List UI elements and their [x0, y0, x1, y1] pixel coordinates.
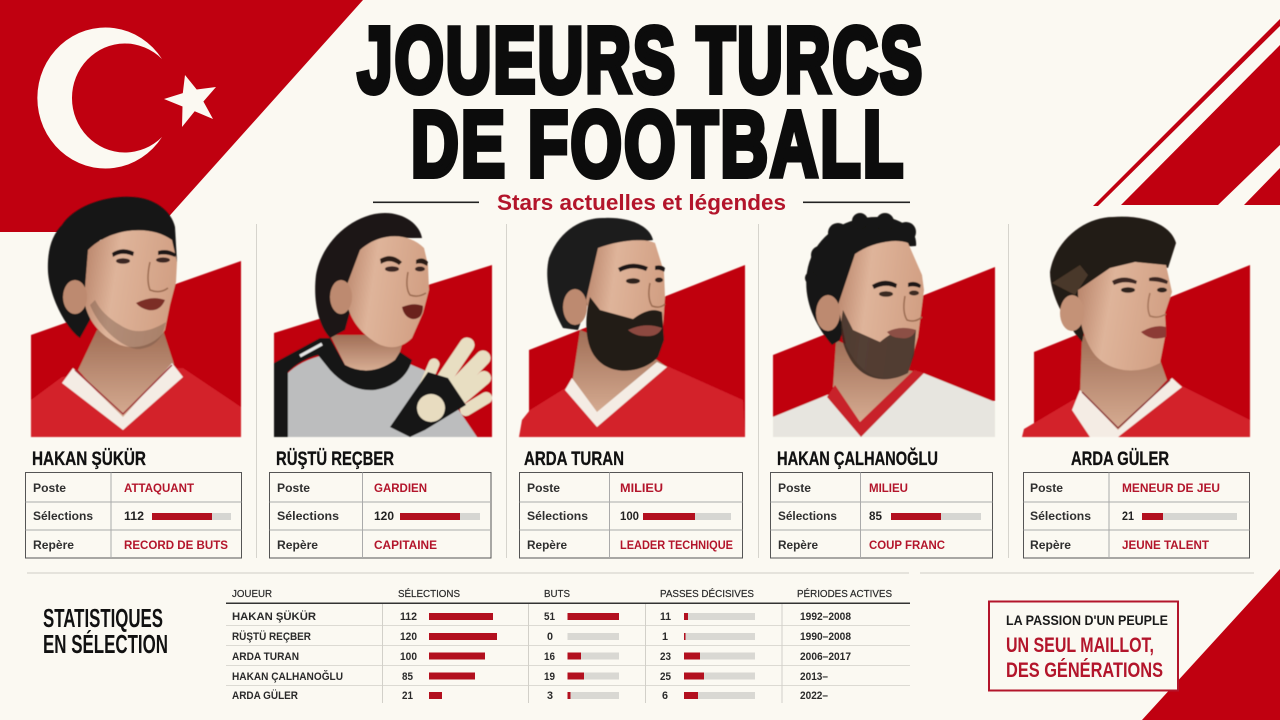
portrait: Rüştü Reçber: [274, 213, 492, 437]
section heading: statistics: STATISTIQUES: [43, 603, 163, 633]
callout: DES GÉNÉRATIONS: [1006, 659, 1163, 682]
stats table: 112: [124, 509, 144, 523]
row: Hakan Şükür: HAKAN ŞÜKÜR: [232, 610, 316, 623]
row: Hakan Şükür: 51: [544, 611, 555, 623]
player name: ARDA TURAN: [524, 448, 624, 470]
section rule: [27, 572, 1254, 574]
row: Arda Turan: 23: [660, 651, 671, 663]
player name: ARDA GÜLER: [1071, 447, 1169, 470]
stats table: MILIEU: [869, 481, 908, 495]
stats table: Repère: [778, 538, 818, 552]
statistics table: [226, 587, 910, 703]
row: Arda Turan: 16: [544, 651, 555, 663]
row: Arda Turan: [232, 651, 851, 663]
row: Rüştü Reçber: [232, 630, 851, 643]
table header: PÉRIODES ACTIVES: [797, 587, 892, 600]
stats table: CAPITAINE: [374, 538, 437, 552]
icon: crescent: [37, 27, 162, 168]
row: Hakan Çalhanoğlu: HAKAN ÇALHANOĞLU: [232, 670, 343, 683]
stats table: [770, 472, 992, 558]
section heading: statistics: [43, 603, 168, 659]
stats table: Repère: [1030, 538, 1071, 552]
stats table: Repère: [527, 538, 567, 552]
corner stripes top right: [1093, 19, 1280, 206]
stats table: Poste: [527, 481, 560, 495]
portrait: Arda Güler: [1022, 217, 1250, 437]
stats table: [270, 472, 491, 558]
player name: HAKAN ŞÜKÜR: [32, 447, 146, 470]
player name: HAKAN ÇALHANOĞLU: [777, 447, 938, 470]
table header: SÉLECTIONS: [398, 587, 460, 600]
stats table: 21: [1122, 509, 1134, 523]
row: Hakan Şükür: 1992–2008: [800, 611, 851, 623]
row: Hakan Şükür: 11: [660, 611, 671, 623]
stats table: RECORD DE BUTS: [124, 538, 228, 552]
stats table: [520, 472, 742, 558]
icon: star: [164, 75, 216, 127]
card: Arda Turan: [519, 218, 745, 558]
callout: UN SEUL MAILLOT,: [1006, 634, 1154, 657]
row: Rüştü Reçber: 1: [662, 631, 668, 643]
table header: JOUEUR: [232, 588, 272, 600]
stats table: Repère: [33, 538, 74, 552]
row: Arda Güler: 6: [662, 690, 668, 702]
stats table: Poste: [277, 481, 310, 495]
row: Arda Güler: 21: [402, 690, 413, 702]
card: Rüştü Reçber: [270, 213, 492, 558]
title: JOUEURS TURCS: [358, 8, 924, 112]
stats table: MENEUR DE JEU: [1122, 481, 1220, 495]
row: Hakan Çalhanoğlu: 25: [660, 671, 671, 683]
stats table: 120: [374, 509, 394, 523]
table header: PASSES DÉCISIVES: [660, 587, 754, 600]
corner triangle bottom right: [1142, 569, 1280, 720]
table header: BUTS: [544, 588, 570, 600]
row: Hakan Çalhanoğlu: 19: [544, 671, 555, 683]
row: Arda Turan: ARDA TURAN: [232, 651, 299, 663]
stats table: Sélections: [33, 509, 93, 523]
row: Rüştü Reçber: 0: [547, 631, 553, 643]
card: Hakan Çalhanoğlu: [770, 213, 995, 558]
stats table: MILIEU: [620, 481, 663, 495]
stats table: Sélections: [527, 509, 588, 523]
stats table: LEADER TECHNIQUE: [620, 538, 733, 552]
card separators: [256, 224, 1009, 558]
title: [358, 8, 924, 197]
row: Rüştü Reçber: 120: [400, 631, 417, 643]
row: Arda Güler: ARDA GÜLER: [232, 689, 298, 702]
row: Hakan Şükür: 112: [400, 611, 417, 623]
player name: RÜŞTÜ REÇBER: [276, 447, 394, 470]
stats table: JEUNE TALENT: [1122, 538, 1210, 552]
row: Arda Güler: 2022–: [800, 690, 828, 702]
stats table: ATTAQUANT: [124, 481, 195, 495]
row: Arda Turan: 100: [400, 651, 417, 663]
title: DE FOOTBALL: [411, 93, 905, 197]
stats table: Poste: [1030, 481, 1063, 495]
subtitle: Stars actuelles et légendes: [497, 190, 786, 215]
portrait: Hakan Şükür: [31, 197, 241, 437]
stats table: COUP FRANC: [869, 538, 945, 552]
stats table: Sélections: [1030, 509, 1091, 523]
stats table: [1024, 472, 1250, 558]
portrait: Arda Turan: [519, 218, 745, 437]
grey bar tracks: [568, 613, 755, 699]
row: Rüştü Reçber: RÜŞTÜ REÇBER: [232, 630, 311, 643]
card: Hakan Şükür: [26, 197, 242, 558]
flag banner: [0, 0, 363, 232]
stats table: Poste: [778, 481, 811, 495]
stats table: 100: [620, 509, 639, 523]
section heading: statistics: EN SÉLECTION: [43, 629, 168, 659]
row: Arda Turan: 2006–2017: [800, 651, 851, 663]
stats table: Poste: [33, 481, 66, 495]
stats table: [26, 472, 242, 558]
row: Hakan Çalhanoğlu: 85: [402, 671, 413, 683]
callout: [989, 602, 1178, 690]
callout: LA PASSION D'UN PEUPLE: [1006, 612, 1168, 628]
row: Hakan Çalhanoğlu: 2013–: [800, 671, 828, 683]
row: Arda Güler: [232, 689, 828, 702]
row: Hakan Şükür: [232, 610, 851, 623]
table header: [226, 587, 910, 604]
row: Hakan Çalhanoğlu: [232, 670, 828, 683]
row: Rüştü Reçber: 1990–2008: [800, 631, 851, 643]
stats table: Sélections: [277, 509, 339, 523]
portrait: Hakan Çalhanoğlu: [773, 213, 995, 437]
stats table: 85: [869, 509, 882, 523]
card: Arda Güler: [1022, 217, 1250, 558]
stats table: GARDIEN: [374, 481, 427, 495]
stats table: Repère: [277, 538, 318, 552]
row: Arda Güler: 3: [547, 690, 553, 702]
stats table: Sélections: [778, 509, 837, 523]
